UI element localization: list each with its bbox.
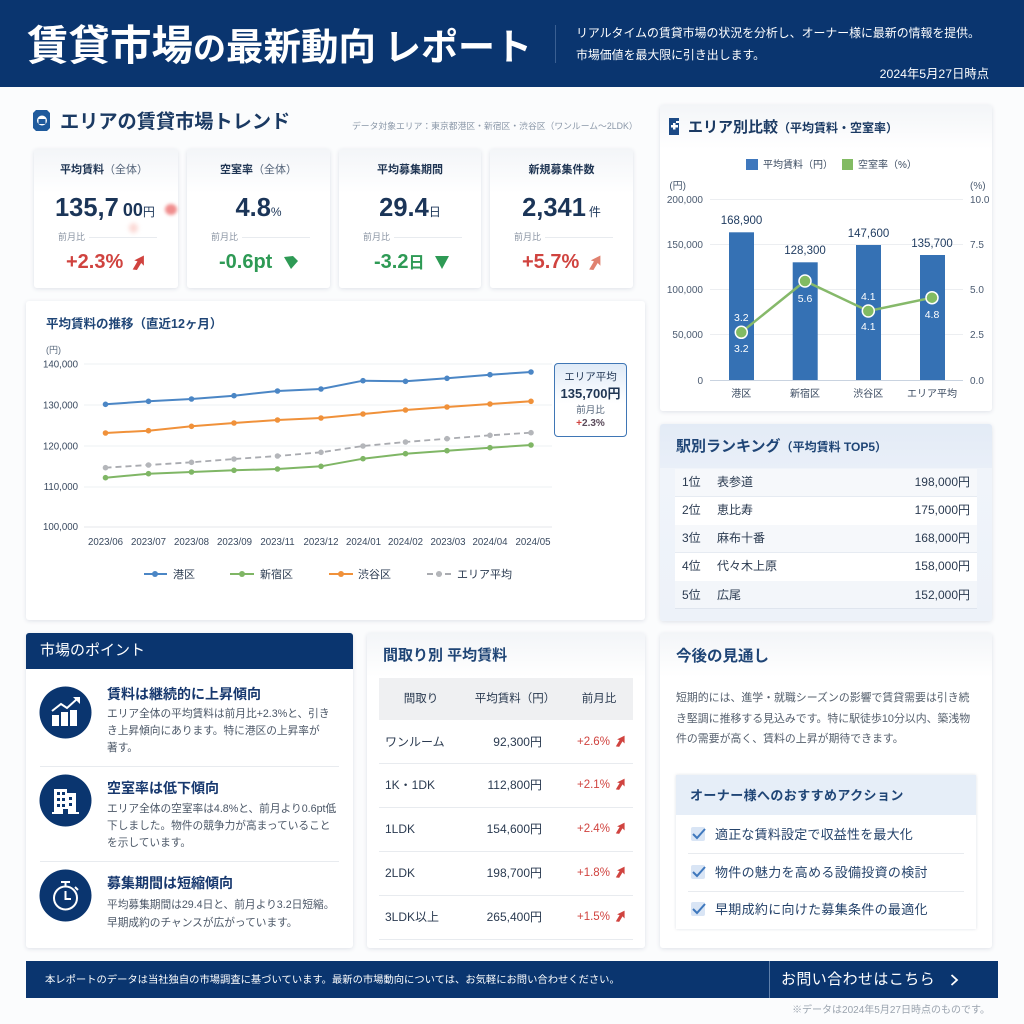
ranking row 2: 2位 bbox=[682, 503, 701, 517]
ranking row 3: 3位 bbox=[682, 531, 701, 545]
owner actions box bbox=[676, 775, 976, 929]
KPI card: vacancy bbox=[187, 149, 330, 288]
action 3: 早期成約に向けた募集条件の最適化 bbox=[715, 902, 928, 917]
combo chart: 4.1 bbox=[861, 321, 876, 333]
line chart: 100,000 bbox=[43, 522, 79, 533]
ranking row 3: 168,000円 bbox=[915, 531, 970, 545]
point 2: vacancy falling bbox=[40, 774, 336, 849]
table row 1: +2.6% bbox=[577, 736, 610, 748]
outlook text: き堅調に推移する見込みです。特に駅徒歩10分以内、築浅物 bbox=[676, 712, 970, 724]
line chart: 2023/09 bbox=[217, 537, 252, 548]
header description: 市場価値を最大限に引き出します。 bbox=[576, 48, 765, 62]
outlook text: 件の需要が高く、賃料の上昇が期待できます。 bbox=[676, 733, 904, 745]
ranking row 1: 1位 bbox=[682, 475, 701, 489]
point 1: rent rising: き上昇傾向にあります。特に港区の上昇率が bbox=[107, 725, 320, 737]
table row 5: 3LDK以上 bbox=[385, 910, 439, 924]
legend: 空室率（%） bbox=[858, 159, 917, 171]
table row 5 bbox=[379, 896, 633, 940]
change: -0.6pt bbox=[219, 251, 272, 273]
ranking row 4 bbox=[675, 553, 977, 581]
callout: area average: 前月比 bbox=[576, 405, 605, 416]
point 2: vacancy falling: を示しています。 bbox=[107, 837, 191, 849]
table row 5: 265,400円 bbox=[487, 910, 542, 924]
point 2: vacancy falling: エリア全体の空室率は4.8%と、前月より0.6pt低 bbox=[107, 803, 336, 815]
chart legend: 港区 bbox=[173, 568, 195, 581]
contact call to action: お問い合わせはこちら bbox=[781, 971, 935, 988]
ranking row 5: 広尾 bbox=[717, 588, 741, 602]
icon: comparison bbox=[669, 118, 679, 135]
outlook text bbox=[676, 692, 970, 745]
combo chart: 135,700 bbox=[911, 238, 953, 250]
panel: station ranking bbox=[660, 424, 992, 621]
value: 29.4日 bbox=[379, 194, 441, 222]
table row 3: 1LDK bbox=[385, 822, 415, 836]
panel header: 市場のポイント bbox=[40, 642, 145, 659]
value: 4.8% bbox=[235, 194, 282, 222]
KPI card: listing period: 前月比 bbox=[363, 232, 390, 242]
point 1: rent rising: 賃料は継続的に上昇傾向 bbox=[107, 686, 261, 702]
icon: rising chart bbox=[40, 686, 92, 738]
ranking row 5: 152,000円 bbox=[915, 588, 970, 602]
change: -3.2日 bbox=[374, 251, 424, 273]
combo chart: (円) bbox=[669, 181, 686, 192]
chart legend: 新宿区 bbox=[260, 567, 293, 581]
line chart: 2023/12 bbox=[303, 537, 339, 548]
KPI card: new listings: 前月比 bbox=[514, 232, 541, 242]
action 1: 適正な賃料設定で収益性を最大化 bbox=[715, 827, 913, 842]
ranking row 2 bbox=[675, 497, 977, 525]
table row 2: 1K・1DK bbox=[385, 778, 435, 792]
line chart: 2024/05 bbox=[515, 537, 551, 548]
line chart: 120,000 bbox=[43, 442, 79, 452]
table row 2: 112,800円 bbox=[488, 778, 542, 792]
line chart: 140,000 bbox=[43, 360, 79, 370]
combo chart: 2.5 bbox=[970, 330, 984, 341]
header description: リアルタイムの賃貸市場の状況を分析し、オーナー様に最新の情報を提供。 bbox=[576, 26, 980, 40]
data scope note: データ対象エリア：東京都港区・新宿区・渋谷区（ワンルーム〜2LDK） bbox=[352, 121, 638, 131]
point 3: listing period shorter bbox=[40, 870, 334, 929]
icon: section lock bbox=[33, 110, 50, 131]
footer message: 本レポートのデータは当社独自の市場調査に基づいています。最新の市場動向については、お気軽にお問い合わせください。 bbox=[45, 975, 620, 986]
combo chart: 港区 bbox=[731, 388, 751, 400]
action 2: 物件の魅力を高める設備投資の検討 bbox=[715, 865, 928, 880]
panel: market points bbox=[26, 633, 353, 948]
KPI card: average rent: 平均賃料（全体） bbox=[60, 164, 148, 176]
chart legend: 渋谷区 bbox=[358, 568, 391, 581]
point 2: vacancy falling: 空室率は低下傾向 bbox=[107, 780, 219, 796]
point 1: rent rising bbox=[40, 686, 330, 754]
point 1: rent rising: 著す。 bbox=[107, 742, 138, 754]
line chart: 110,000 bbox=[44, 482, 79, 493]
combo chart: 50,000 bbox=[672, 330, 703, 341]
combo chart: エリア平均 bbox=[907, 387, 957, 400]
line chart bbox=[43, 345, 552, 581]
outlook heading: 今後の見通し bbox=[676, 648, 769, 665]
table row 2 bbox=[379, 764, 633, 808]
ranking row 4: 代々木上原 bbox=[717, 559, 777, 573]
actions heading: オーナー様へのおすすめアクション bbox=[690, 788, 904, 803]
point 3: listing period shorter: 平均募集期間は29.4日と、前月より3.2日短縮。 bbox=[107, 899, 334, 911]
header band bbox=[0, 0, 1024, 87]
table row 1: 92,300円 bbox=[493, 735, 542, 749]
icon: stopwatch bbox=[40, 870, 92, 922]
ranking row 5: 5位 bbox=[682, 588, 701, 602]
footer bar bbox=[26, 961, 998, 998]
combo chart: 168,900 bbox=[721, 215, 762, 227]
ranking row 1: 198,000円 bbox=[915, 475, 970, 489]
line chart: 130,000 bbox=[43, 400, 79, 412]
title: 賃貸市場の最新動向レポート bbox=[27, 22, 532, 69]
KPI card: vacancy: 空室率（全体） bbox=[220, 164, 297, 176]
point 3: listing period shorter: 早期成約のチャンスが広がっています。 bbox=[107, 917, 297, 929]
line chart: 2024/01 bbox=[346, 537, 381, 548]
ranking row 1: 表参道 bbox=[717, 475, 753, 489]
combo chart: 渋谷区 bbox=[853, 387, 883, 400]
ranking row 5 bbox=[675, 581, 977, 609]
ranking heading: 駅別ランキング（平均賃料 TOP5） bbox=[676, 438, 887, 455]
combo chart: 100,000 bbox=[667, 285, 703, 296]
combo chart: 7.5 bbox=[970, 240, 984, 251]
combo chart: 147,600 bbox=[848, 228, 889, 240]
table header bbox=[379, 678, 633, 720]
panel header bbox=[26, 633, 353, 669]
combo chart: 4.8 bbox=[925, 309, 939, 321]
table row 1 bbox=[379, 720, 633, 764]
line chart: 2023/11 bbox=[260, 537, 295, 548]
data date note: ※データは2024年5月27日時点のものです。 bbox=[792, 1005, 990, 1016]
table row 5: +1.5% bbox=[577, 911, 610, 923]
combo chart: 200,000 bbox=[667, 195, 703, 206]
KPI card: new listings: 新規募集件数 bbox=[528, 164, 594, 176]
value: 2,341件 bbox=[522, 194, 601, 222]
table row 4 bbox=[379, 852, 633, 896]
table header: 間取り bbox=[404, 693, 438, 705]
KPI card: listing period: 平均募集期間 bbox=[377, 164, 443, 176]
table row 4: +1.8% bbox=[577, 867, 610, 879]
panel: area comparison chart bbox=[660, 105, 992, 411]
combo chart: 5.6 bbox=[798, 293, 812, 305]
contact call to action bbox=[769, 961, 999, 998]
panel: rent by layout bbox=[367, 633, 645, 948]
callout: area average: エリア平均 bbox=[564, 371, 617, 383]
line chart: 2023/06 bbox=[88, 537, 123, 548]
combo chart: 4.1 bbox=[861, 291, 876, 303]
KPI card: average rent: 前月比 bbox=[58, 232, 85, 242]
callout: area average bbox=[554, 363, 627, 437]
combo chart: (%) bbox=[970, 181, 986, 192]
chart legend: エリア平均 bbox=[457, 567, 512, 581]
KPI card: average rent bbox=[34, 149, 178, 288]
combo chart: 0.0 bbox=[970, 376, 984, 387]
KPI card: vacancy: 前月比 bbox=[211, 232, 238, 242]
callout: area average: 135,700円 bbox=[560, 386, 620, 401]
ranking row 3 bbox=[675, 525, 977, 553]
combo chart: 150,000 bbox=[667, 240, 703, 251]
line chart: 2024/04 bbox=[472, 537, 508, 548]
table row 2: +2.1% bbox=[577, 779, 610, 791]
ranking row 2: 175,000円 bbox=[915, 503, 970, 517]
section heading: trend: エリアの賃貸市場トレンド bbox=[60, 112, 290, 133]
value: 135,700円 bbox=[55, 194, 155, 222]
combo chart: 新宿区 bbox=[790, 387, 820, 400]
chart heading: エリア別比較（平均賃料・空室率） bbox=[688, 119, 898, 136]
point 3: listing period shorter: 募集期間は短縮傾向 bbox=[107, 875, 233, 891]
combo chart: 5.0 bbox=[970, 285, 984, 296]
table heading: 間取り別 平均賃料 bbox=[383, 647, 507, 664]
combo chart: 10.0 bbox=[970, 195, 990, 206]
change: +5.7% bbox=[522, 251, 579, 273]
report date: 2024年5月27日時点 bbox=[880, 67, 989, 81]
point 1: rent rising: エリア全体の平均賃料は前月比+2.3%と、引き bbox=[107, 708, 330, 720]
table row 4: 2LDK bbox=[385, 866, 415, 880]
table row 3 bbox=[379, 808, 633, 852]
KPI card: listing period bbox=[339, 149, 481, 288]
legend bbox=[746, 158, 917, 171]
line chart: 2023/08 bbox=[174, 537, 209, 548]
ranking row 1 bbox=[675, 469, 977, 497]
table header: 前月比 bbox=[582, 693, 616, 705]
combo chart bbox=[667, 158, 990, 400]
KPI card: new listings bbox=[490, 149, 633, 288]
table row 1: ワンルーム bbox=[385, 735, 445, 749]
combo chart: 3.2 bbox=[734, 312, 749, 324]
panel: outlook bbox=[660, 633, 992, 948]
point 2: vacancy falling: 下しました。物件の競争力が高まっていること bbox=[107, 820, 330, 832]
table header: 平均賃料（円） bbox=[475, 693, 555, 705]
change: +2.3% bbox=[66, 251, 123, 273]
table row 3: +2.4% bbox=[577, 823, 610, 835]
line chart: 2023/07 bbox=[131, 537, 166, 548]
legend: 平均賃料（円） bbox=[763, 158, 833, 171]
table row 4: 198,700円 bbox=[487, 866, 542, 880]
outlook text: 短期的には、進学・就職シーズンの影響で賃貸需要は引き続 bbox=[676, 692, 970, 704]
ranking row 3: 麻布十番 bbox=[717, 531, 765, 545]
line chart: 2023/03 bbox=[430, 537, 466, 548]
combo chart: 0 bbox=[697, 376, 703, 387]
icon: building bbox=[40, 774, 92, 826]
table row 3: 154,600円 bbox=[487, 822, 542, 836]
header description bbox=[576, 26, 980, 62]
ranking row 4: 158,000円 bbox=[915, 559, 970, 573]
combo chart: 128,300 bbox=[784, 245, 826, 257]
callout: area average: +2.3% bbox=[576, 418, 605, 429]
ranking row 2: 恵比寿 bbox=[717, 503, 753, 517]
line chart: (円) bbox=[46, 345, 61, 355]
line chart: 2024/02 bbox=[388, 537, 423, 548]
chart legend bbox=[144, 567, 512, 581]
ranking row 4: 4位 bbox=[682, 559, 701, 573]
actions heading bbox=[676, 775, 976, 815]
combo chart: 3.2 bbox=[734, 343, 749, 355]
panel: rent trend line chart bbox=[26, 301, 645, 620]
chart heading: 平均賃料の推移（直近12ヶ月） bbox=[46, 317, 222, 331]
